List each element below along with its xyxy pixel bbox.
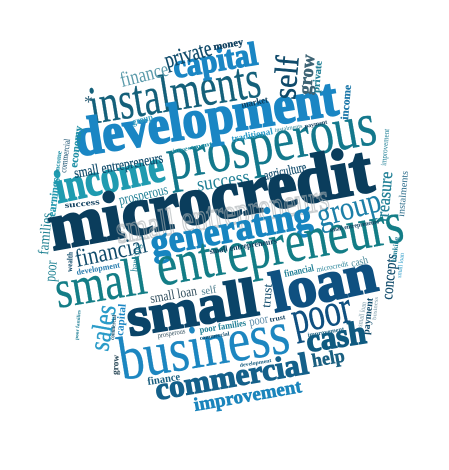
word: microcredit small: microcredit	[316, 259, 350, 274]
word: trust bold small: trust	[269, 313, 287, 324]
ghost word over headline: small entrepreneurs	[113, 177, 332, 252]
word: small loan thin: small loan	[149, 284, 198, 307]
word: traditional: traditional	[231, 127, 274, 145]
word: financial: financial	[73, 231, 150, 273]
word: income small vertical: income	[53, 150, 64, 173]
word: payment: payment	[304, 120, 328, 130]
word: commercial small vertical: commercial	[110, 314, 118, 340]
word: improvement small: improvement	[307, 327, 345, 339]
word: small entrepreneurs bold: small entrepreneurs	[209, 235, 278, 256]
word: prosperous small bottom: prosperous	[157, 326, 186, 340]
word: small (thin): small	[50, 245, 151, 320]
word: asterisk: *	[84, 92, 93, 112]
word: earnings vertical: earnings	[46, 177, 63, 217]
word: payment vertical: payment	[361, 297, 376, 335]
word: concepts vertical: concepts	[379, 253, 401, 300]
word: small entrepreneurs upper: small entrepreneurs	[73, 151, 164, 182]
word: development small: development	[76, 259, 121, 277]
word: cash thin: cash	[350, 254, 370, 270]
word: grow: grow	[295, 53, 319, 95]
word: small entrepreneurs top right: small entrepreneurs	[329, 218, 380, 234]
word: families vertical: families	[36, 212, 56, 255]
word: generating: generating	[147, 193, 315, 265]
word: grow bold vertical: grow	[110, 354, 121, 375]
word: poor vertical: poor	[42, 259, 61, 282]
word: instalments vertical: instalments	[396, 170, 411, 217]
word: capital vertical: capital	[114, 303, 129, 336]
word: development bottom: development	[239, 358, 272, 369]
word: small loan thin vertical: small loan	[355, 301, 368, 327]
word: trust vertical: trust	[258, 283, 275, 308]
word: treasure vertical: treasure	[372, 171, 396, 222]
word: development: development	[70, 67, 342, 168]
word: poor families bold: poor families	[199, 319, 247, 336]
word: finance bold: finance	[147, 371, 181, 388]
word: commercial small bold: commercial	[199, 331, 230, 342]
word: improvement bold: improvement	[192, 376, 304, 416]
word: banking right vertical: banking	[389, 236, 401, 262]
word: poor families vertical small: poor families	[75, 310, 83, 340]
word: self: self	[267, 55, 307, 101]
word: help: help	[310, 346, 346, 372]
word: group: group	[312, 182, 385, 235]
word: group small: group	[131, 113, 154, 128]
word: loan bold: loan	[265, 241, 382, 325]
word: cash bold: cash	[304, 315, 369, 360]
word: small bold: small	[122, 267, 262, 348]
word: income: income	[49, 140, 169, 213]
word: small loan right vertical: small loan	[396, 252, 406, 278]
word: private vertical: private	[311, 60, 325, 93]
word: wealth vertical: wealth	[65, 251, 75, 272]
word: market: market	[241, 95, 270, 111]
word: financial teal: financial	[283, 263, 315, 280]
word: income vertical: income	[339, 84, 354, 120]
word: banking vertical: banking	[129, 243, 144, 272]
word: business vertical small: business	[372, 296, 380, 320]
word: prosperous: prosperous	[161, 90, 381, 194]
word: prosperous small: prosperous	[117, 182, 170, 209]
word: self thin: self	[200, 283, 218, 298]
word: capital: capital	[170, 36, 260, 86]
word: business: business	[113, 299, 294, 394]
word: poor thin small: poor	[248, 310, 270, 329]
word: instalments payment: instalments	[274, 124, 304, 134]
word: commercial vertical: commercial	[58, 138, 72, 173]
word: money: money	[213, 37, 244, 53]
word: microcredit: microcredit	[42, 130, 379, 265]
word: success bold: success	[64, 196, 101, 210]
word: economy vertical: economy	[68, 125, 85, 168]
word: success: success	[195, 166, 251, 196]
word: private: private	[161, 36, 215, 73]
word: investment: investment	[172, 141, 213, 155]
word: sales vertical: sales	[83, 302, 123, 353]
word: instalments: instalments	[84, 49, 265, 136]
word: poor large: poor	[286, 281, 356, 344]
word: improvement vertical: improvement	[379, 128, 391, 166]
word: agriculture: agriculture	[263, 160, 308, 184]
word: Finance: finance	[117, 57, 171, 92]
word: commercial bold: commercial	[152, 345, 311, 407]
